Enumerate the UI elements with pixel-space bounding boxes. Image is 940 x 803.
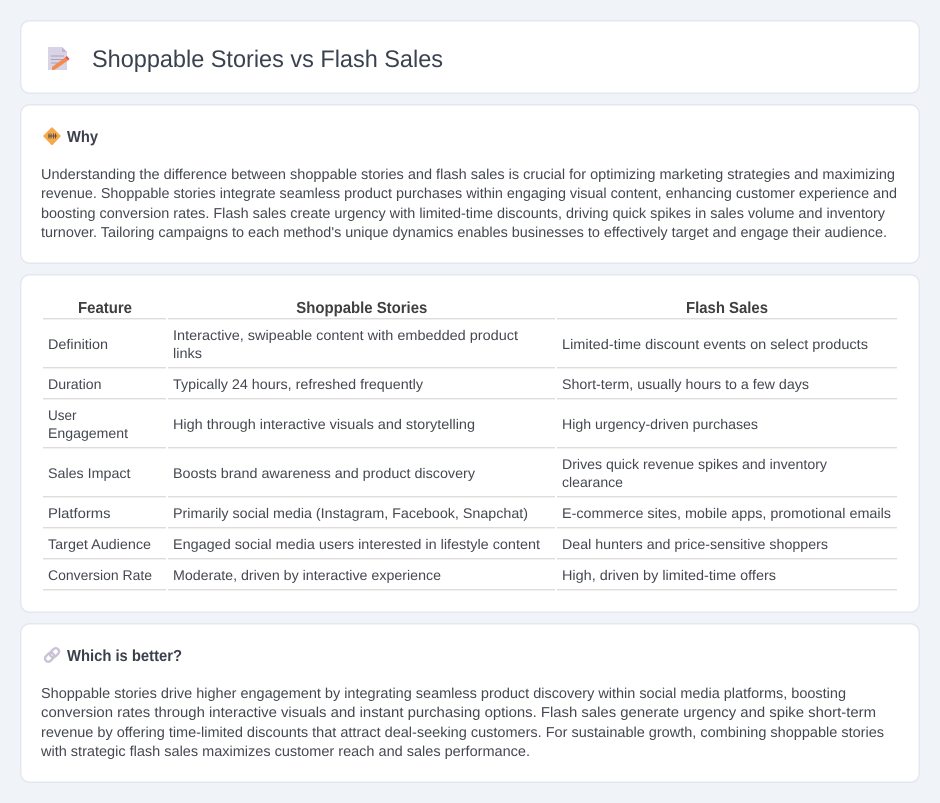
row: conversion rate: High, driven by limited-time offers bbox=[562, 567, 776, 583]
row: definition: Definition bbox=[48, 336, 108, 352]
row: user engagement: User bbox=[48, 407, 77, 423]
panel: why bbox=[21, 105, 919, 263]
row: platforms: Primarily social media (Instagram, Facebook, Snapchat) bbox=[173, 505, 528, 521]
panel: title header bbox=[21, 21, 919, 93]
row: target audience bbox=[48, 536, 828, 552]
row: duration bbox=[48, 376, 809, 392]
row: sales impact: Sales Impact bbox=[48, 465, 131, 481]
heading: why: Why bbox=[67, 129, 98, 146]
row: platforms bbox=[48, 505, 891, 521]
text block: why explanation bbox=[41, 167, 897, 241]
row: duration: Short-term, usually hours to a few days bbox=[562, 376, 809, 392]
row: sales impact: Drives quick revenue spikes and inventory bbox=[562, 456, 827, 472]
icon: chain link bbox=[44, 647, 60, 663]
row: target audience: Engaged social media users interested in lifestyle content bbox=[173, 536, 540, 552]
text block: why explanation: boosting conversion rates. Flash sales create urgency with limited-time discounts, driving quick spikes in sales volume and inventory bbox=[41, 206, 886, 222]
text block: verdict bbox=[40, 686, 884, 760]
row: user engagement: High urgency-driven purchases bbox=[562, 416, 758, 432]
text block: verdict: revenue by offering time-limited discounts that attract deal-seeking customers. For sustainable growth, combining shoppable stories bbox=[41, 725, 884, 741]
row: definition: Interactive, swipeable content with embedded product bbox=[173, 327, 518, 343]
row: conversion rate: Moderate, driven by interactive experience bbox=[173, 567, 441, 583]
row: user engagement: Engagement bbox=[48, 425, 128, 441]
row: platforms: E-commerce sites, mobile apps, promotional emails bbox=[562, 505, 891, 521]
row: definition: Limited-time discount events on select products bbox=[562, 336, 868, 352]
table header row: Feature bbox=[78, 300, 132, 317]
table header row: Shoppable Stories bbox=[296, 300, 427, 317]
text block: why explanation: revenue. Shoppable stories integrate seamless product purchases within engaging visual content, enhancing customer experience and bbox=[41, 186, 897, 202]
table header row: Flash Sales bbox=[686, 300, 768, 317]
row: conversion rate: Conversion Rate bbox=[48, 567, 152, 583]
text block: verdict: with strategic flash sales maximizes customer reach and sales performance. bbox=[40, 744, 530, 760]
row: sales impact bbox=[48, 456, 827, 490]
text block: why explanation: Understanding the difference between shoppable stories and flash sales is crucial for optimizing marketing strategies and maximizing bbox=[41, 167, 895, 183]
panel: which is better bbox=[21, 624, 919, 782]
row: conversion rate bbox=[48, 567, 776, 583]
title: Shoppable Stories vs Flash Sales bbox=[92, 46, 443, 73]
panel: comparison table bbox=[21, 275, 919, 612]
row: target audience: Target Audience bbox=[48, 536, 151, 552]
row: user engagement: High through interactive visuals and storytelling bbox=[173, 416, 475, 432]
row: sales impact: clearance bbox=[562, 474, 623, 490]
row: definition bbox=[48, 327, 868, 361]
text block: verdict: conversion rates through interactive visuals and instant purchasing options. Flash sales generate urgency and spike short-term bbox=[41, 705, 876, 721]
icon: warning diamond bbox=[44, 128, 60, 144]
text block: verdict: Shoppable stories drive higher engagement by integrating seamless product discovery within social media platforms, boosting bbox=[41, 686, 846, 702]
row: definition: links bbox=[173, 345, 202, 361]
table header row bbox=[78, 300, 768, 317]
row: user engagement bbox=[48, 407, 758, 441]
heading: which is better: Which is better? bbox=[67, 648, 182, 665]
row: duration: Duration bbox=[48, 376, 102, 392]
icon: memo with pencil bbox=[48, 47, 70, 70]
row: duration: Typically 24 hours, refreshed frequently bbox=[173, 376, 423, 392]
row: platforms: Platforms bbox=[48, 505, 110, 521]
row: target audience: Deal hunters and price-sensitive shoppers bbox=[562, 536, 828, 552]
row: sales impact: Boosts brand awareness and product discovery bbox=[173, 465, 475, 481]
text block: why explanation: turnover. Tailoring campaigns to each method's unique dynamics enables businesses to effectively target and engage their audience. bbox=[41, 225, 887, 241]
